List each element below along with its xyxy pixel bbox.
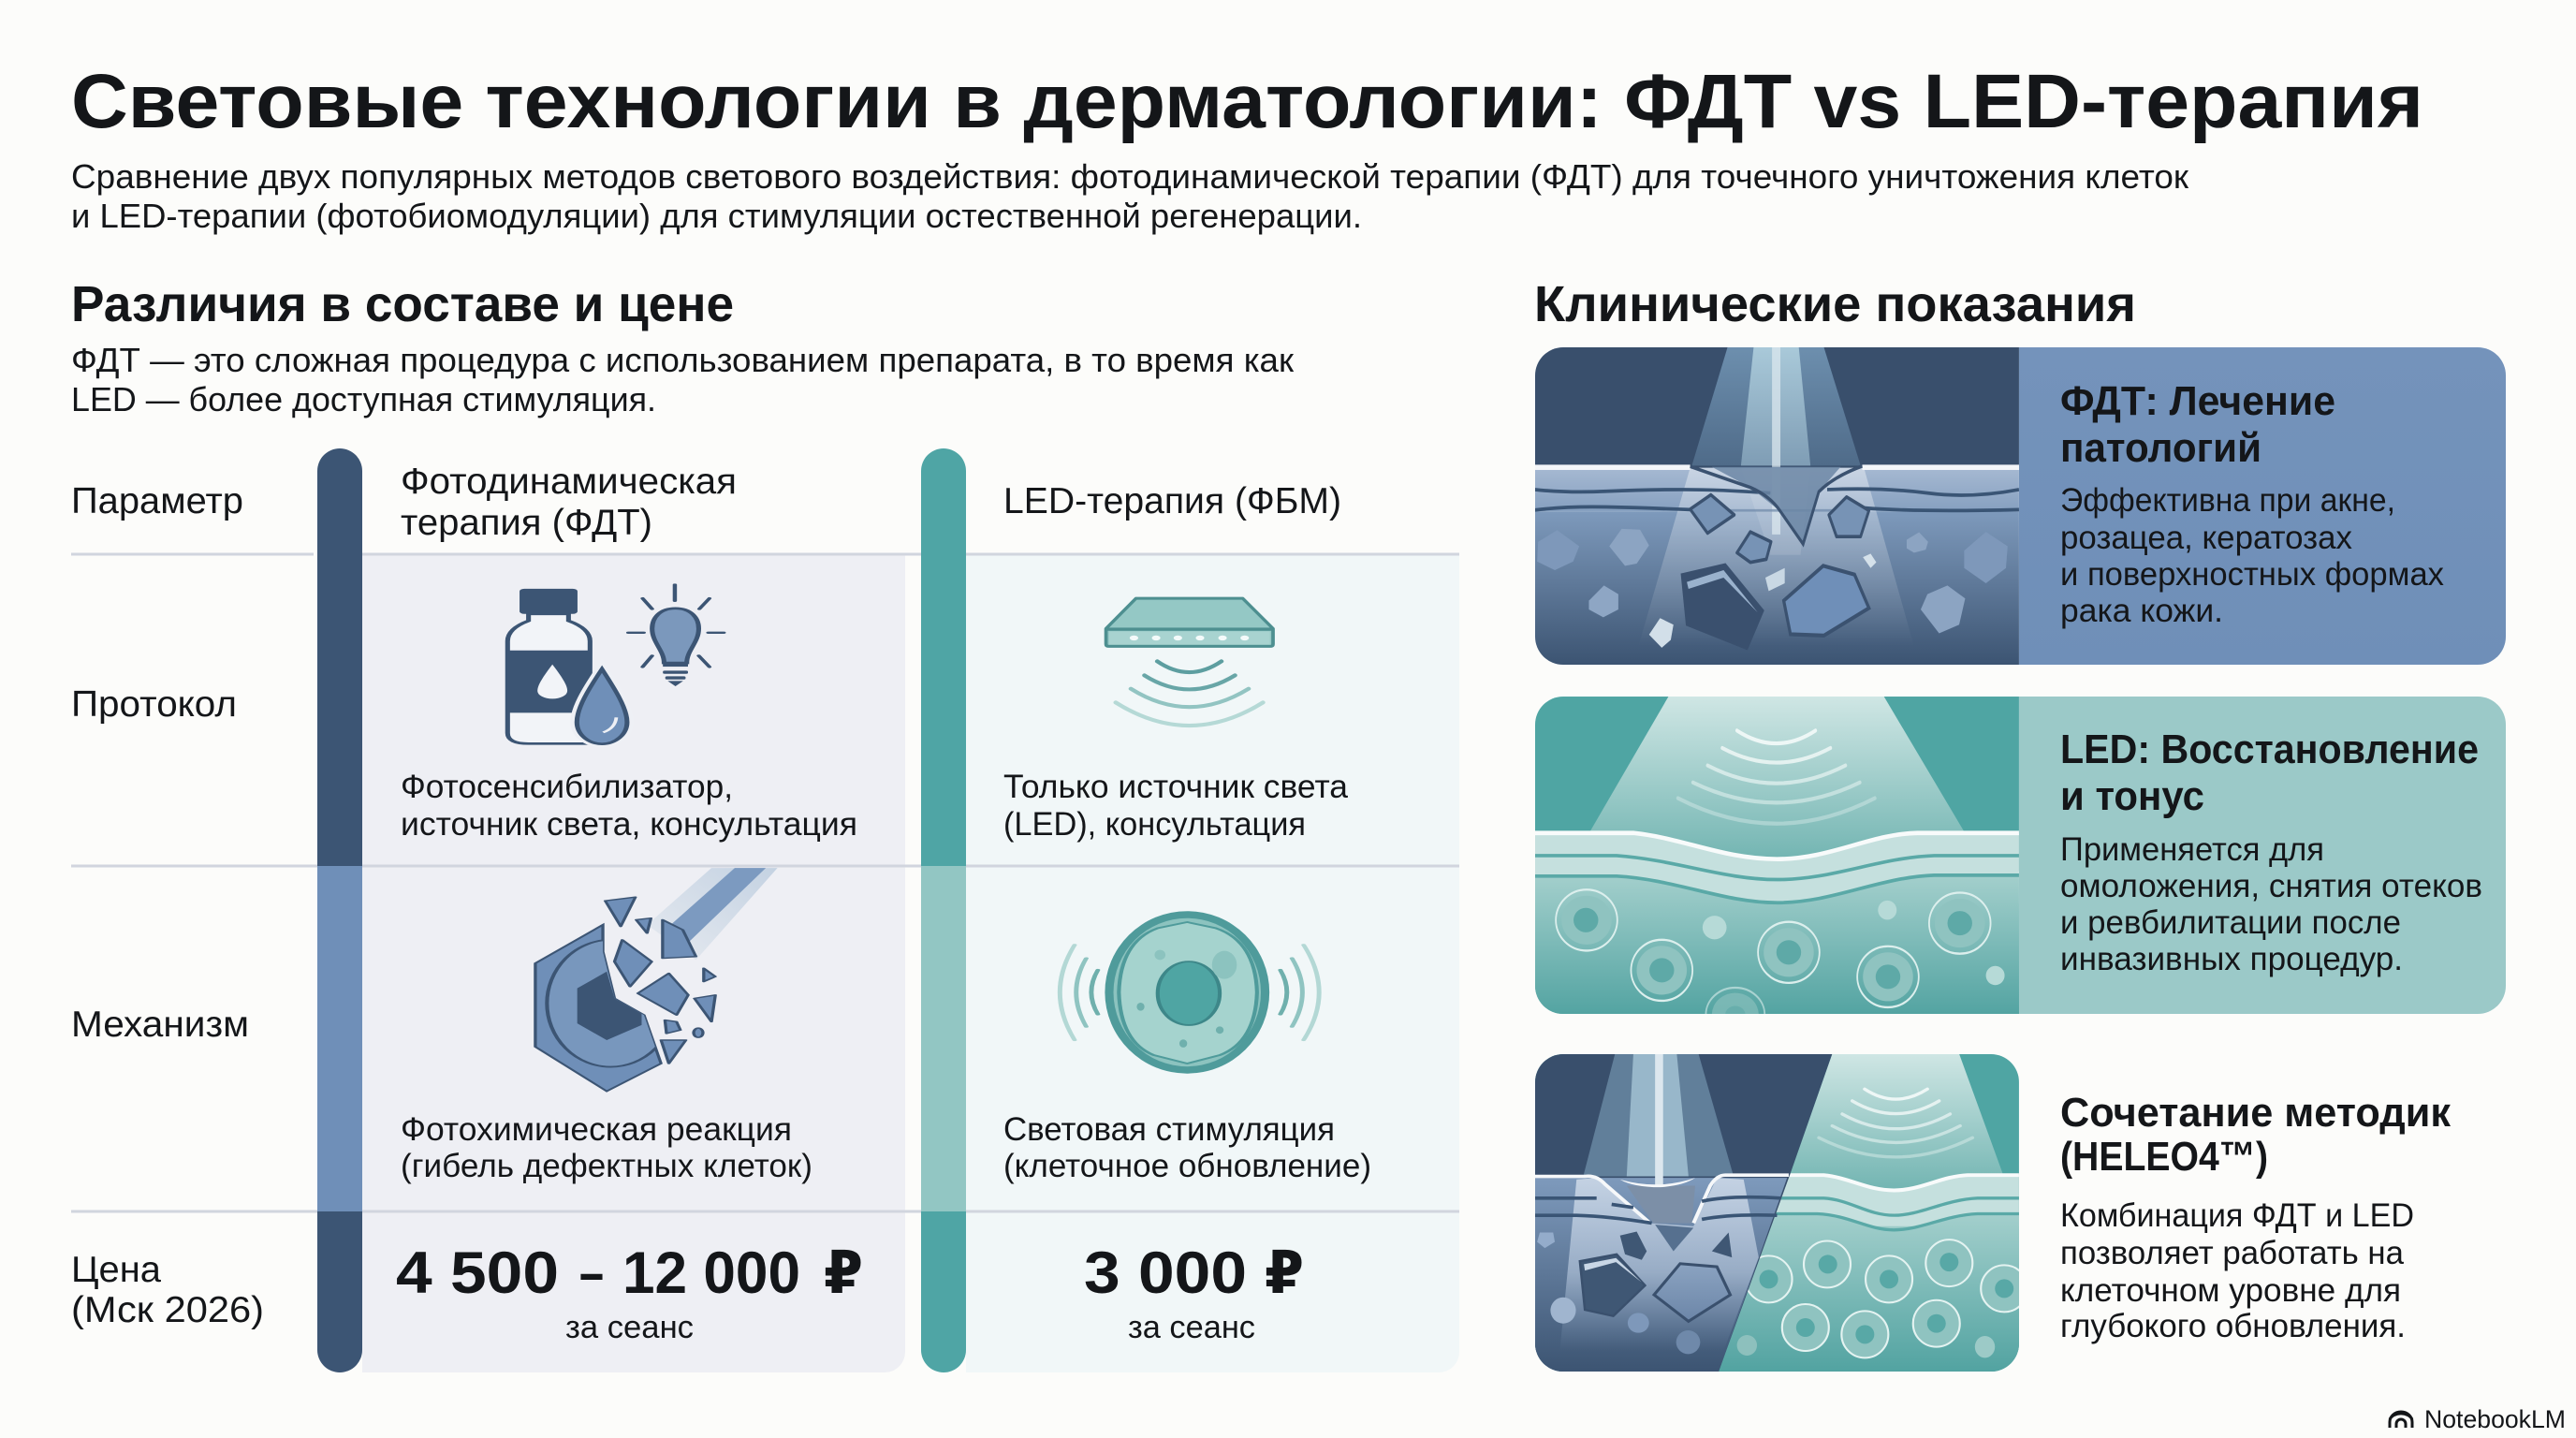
text: FDT mechanism: Фотохимическая реакция bbox=[401, 1111, 792, 1148]
illustration: FDT beam destroying cells bbox=[1535, 347, 2019, 665]
card heading: (HELEO4™) bbox=[2060, 1134, 2268, 1180]
LED half bbox=[1719, 1054, 2027, 1372]
illustration: LED light on healthy skin bbox=[1535, 697, 2019, 1042]
panel: FDT pathologies bbox=[1535, 347, 2506, 665]
heading: clinical indications: Клинические показания bbox=[1534, 276, 2136, 332]
card body: розацеа, кератозах bbox=[2060, 520, 2352, 556]
subtitle: Сравнение двух популярных методов светового воздействия: фотодинамической терапии (ФДТ) для точечного уничтожения клеток bbox=[71, 157, 2188, 196]
row labels: (Мск 2026) bbox=[71, 1290, 264, 1330]
card body: Эффективна при акне, bbox=[2060, 482, 2395, 519]
card heading: LED: Восстановление bbox=[2060, 726, 2479, 772]
icon: glowing cell bbox=[1060, 911, 1319, 1074]
card body: Применяется для bbox=[2060, 831, 2324, 868]
text: LED mechanism: Световая стимуляция bbox=[1003, 1111, 1335, 1148]
column bar: FDT bbox=[317, 448, 362, 1372]
price: LED: 3 000 bbox=[1084, 1240, 1247, 1306]
panel: combined methods bbox=[1535, 1054, 2452, 1372]
card heading: и тонус bbox=[2060, 773, 2204, 819]
subtitle: и LED-терапии (фотобиомодуляции) для стимуляции остественной регенерации. bbox=[71, 197, 1362, 235]
row labels: Цена bbox=[71, 1250, 161, 1290]
text: FDT mechanism: (гибель дефектных клеток) bbox=[401, 1148, 812, 1184]
illustration: split FDT and LED bbox=[1535, 1054, 2027, 1372]
price unit: FDT: за сеанс bbox=[565, 1310, 694, 1345]
card body: инвазивных процедур. bbox=[2060, 941, 2403, 977]
column background: FDT bbox=[362, 555, 905, 1372]
card body: и поверхностных формах bbox=[2060, 556, 2444, 593]
cells bbox=[1555, 888, 2005, 1014]
price: FDT: 12 000 bbox=[622, 1240, 800, 1306]
row labels: Протокол bbox=[71, 684, 237, 725]
text: FDT protocol: Фотосенсибилизатор, bbox=[401, 769, 733, 805]
column header: FDT: терапия (ФДТ) bbox=[401, 503, 652, 543]
icon: NotebookLM bbox=[2390, 1412, 2412, 1428]
card body: клеточном уровне для bbox=[2060, 1272, 2401, 1309]
price: FDT: 4 500 bbox=[396, 1240, 559, 1306]
intro text: differences: ФДТ — это сложная процедура с использованием препарата, в то время как bbox=[71, 341, 1294, 379]
row labels: Параметр bbox=[71, 481, 243, 521]
label: NotebookLM bbox=[2424, 1405, 2566, 1433]
icon: LED panel with waves bbox=[1106, 598, 1273, 726]
card body: и ревбилитации после bbox=[2060, 904, 2401, 941]
card body: глубокого обновления. bbox=[2060, 1308, 2406, 1344]
FDT half bbox=[1535, 1054, 1832, 1372]
column header: FDT: Фотодинамическая bbox=[401, 462, 737, 502]
price unit: LED: за сеанс bbox=[1128, 1310, 1255, 1345]
heading: differences: Различия в составе и цене bbox=[71, 276, 734, 332]
column bar: LED bbox=[921, 448, 966, 1372]
card heading: Сочетание методик bbox=[2060, 1090, 2452, 1136]
icon: shattering cell under beam bbox=[535, 868, 778, 1092]
card text background bbox=[2019, 347, 2506, 665]
cells bbox=[1537, 495, 2008, 649]
text: LED mechanism: (клеточное обновление) bbox=[1003, 1148, 1371, 1184]
notch in skin bbox=[1690, 466, 1862, 544]
price: LED: ₽ bbox=[1265, 1240, 1304, 1306]
intro text: differences: LED — более доступная стимуляция. bbox=[71, 380, 656, 418]
icon: bottle, drop and lamp bbox=[507, 584, 724, 744]
card heading: ФДТ: Лечение bbox=[2060, 378, 2335, 424]
card text background bbox=[2019, 697, 2506, 1014]
title: Световые технологии в дерматологии: ФДТ vs LED-терапия bbox=[71, 59, 2423, 144]
card heading: патологий bbox=[2060, 425, 2261, 471]
card body: омоложения, снятия отеков bbox=[2060, 868, 2482, 904]
price: FDT: ₽ bbox=[824, 1240, 863, 1306]
panel: LED recovery bbox=[1535, 697, 2506, 1042]
watermark: NotebookLM bbox=[2390, 1405, 2566, 1433]
text: LED protocol: Только источник света bbox=[1003, 769, 1349, 805]
text: FDT protocol: источник света, консультация bbox=[401, 806, 857, 843]
price: FDT: – bbox=[579, 1240, 604, 1306]
card body: Комбинация ФДТ и LED bbox=[2060, 1197, 2414, 1234]
card body: рака кожи. bbox=[2060, 593, 2223, 629]
waves bbox=[1677, 730, 1875, 824]
card body: позволяет работать на bbox=[2060, 1235, 2405, 1271]
text: LED protocol: (LED), консультация bbox=[1003, 806, 1306, 843]
column background: LED bbox=[966, 555, 1459, 1372]
comparison table bbox=[71, 448, 1459, 1372]
column header: LED: LED-терапия (ФБМ) bbox=[1003, 481, 1341, 521]
row labels: Механизм bbox=[71, 1005, 249, 1045]
